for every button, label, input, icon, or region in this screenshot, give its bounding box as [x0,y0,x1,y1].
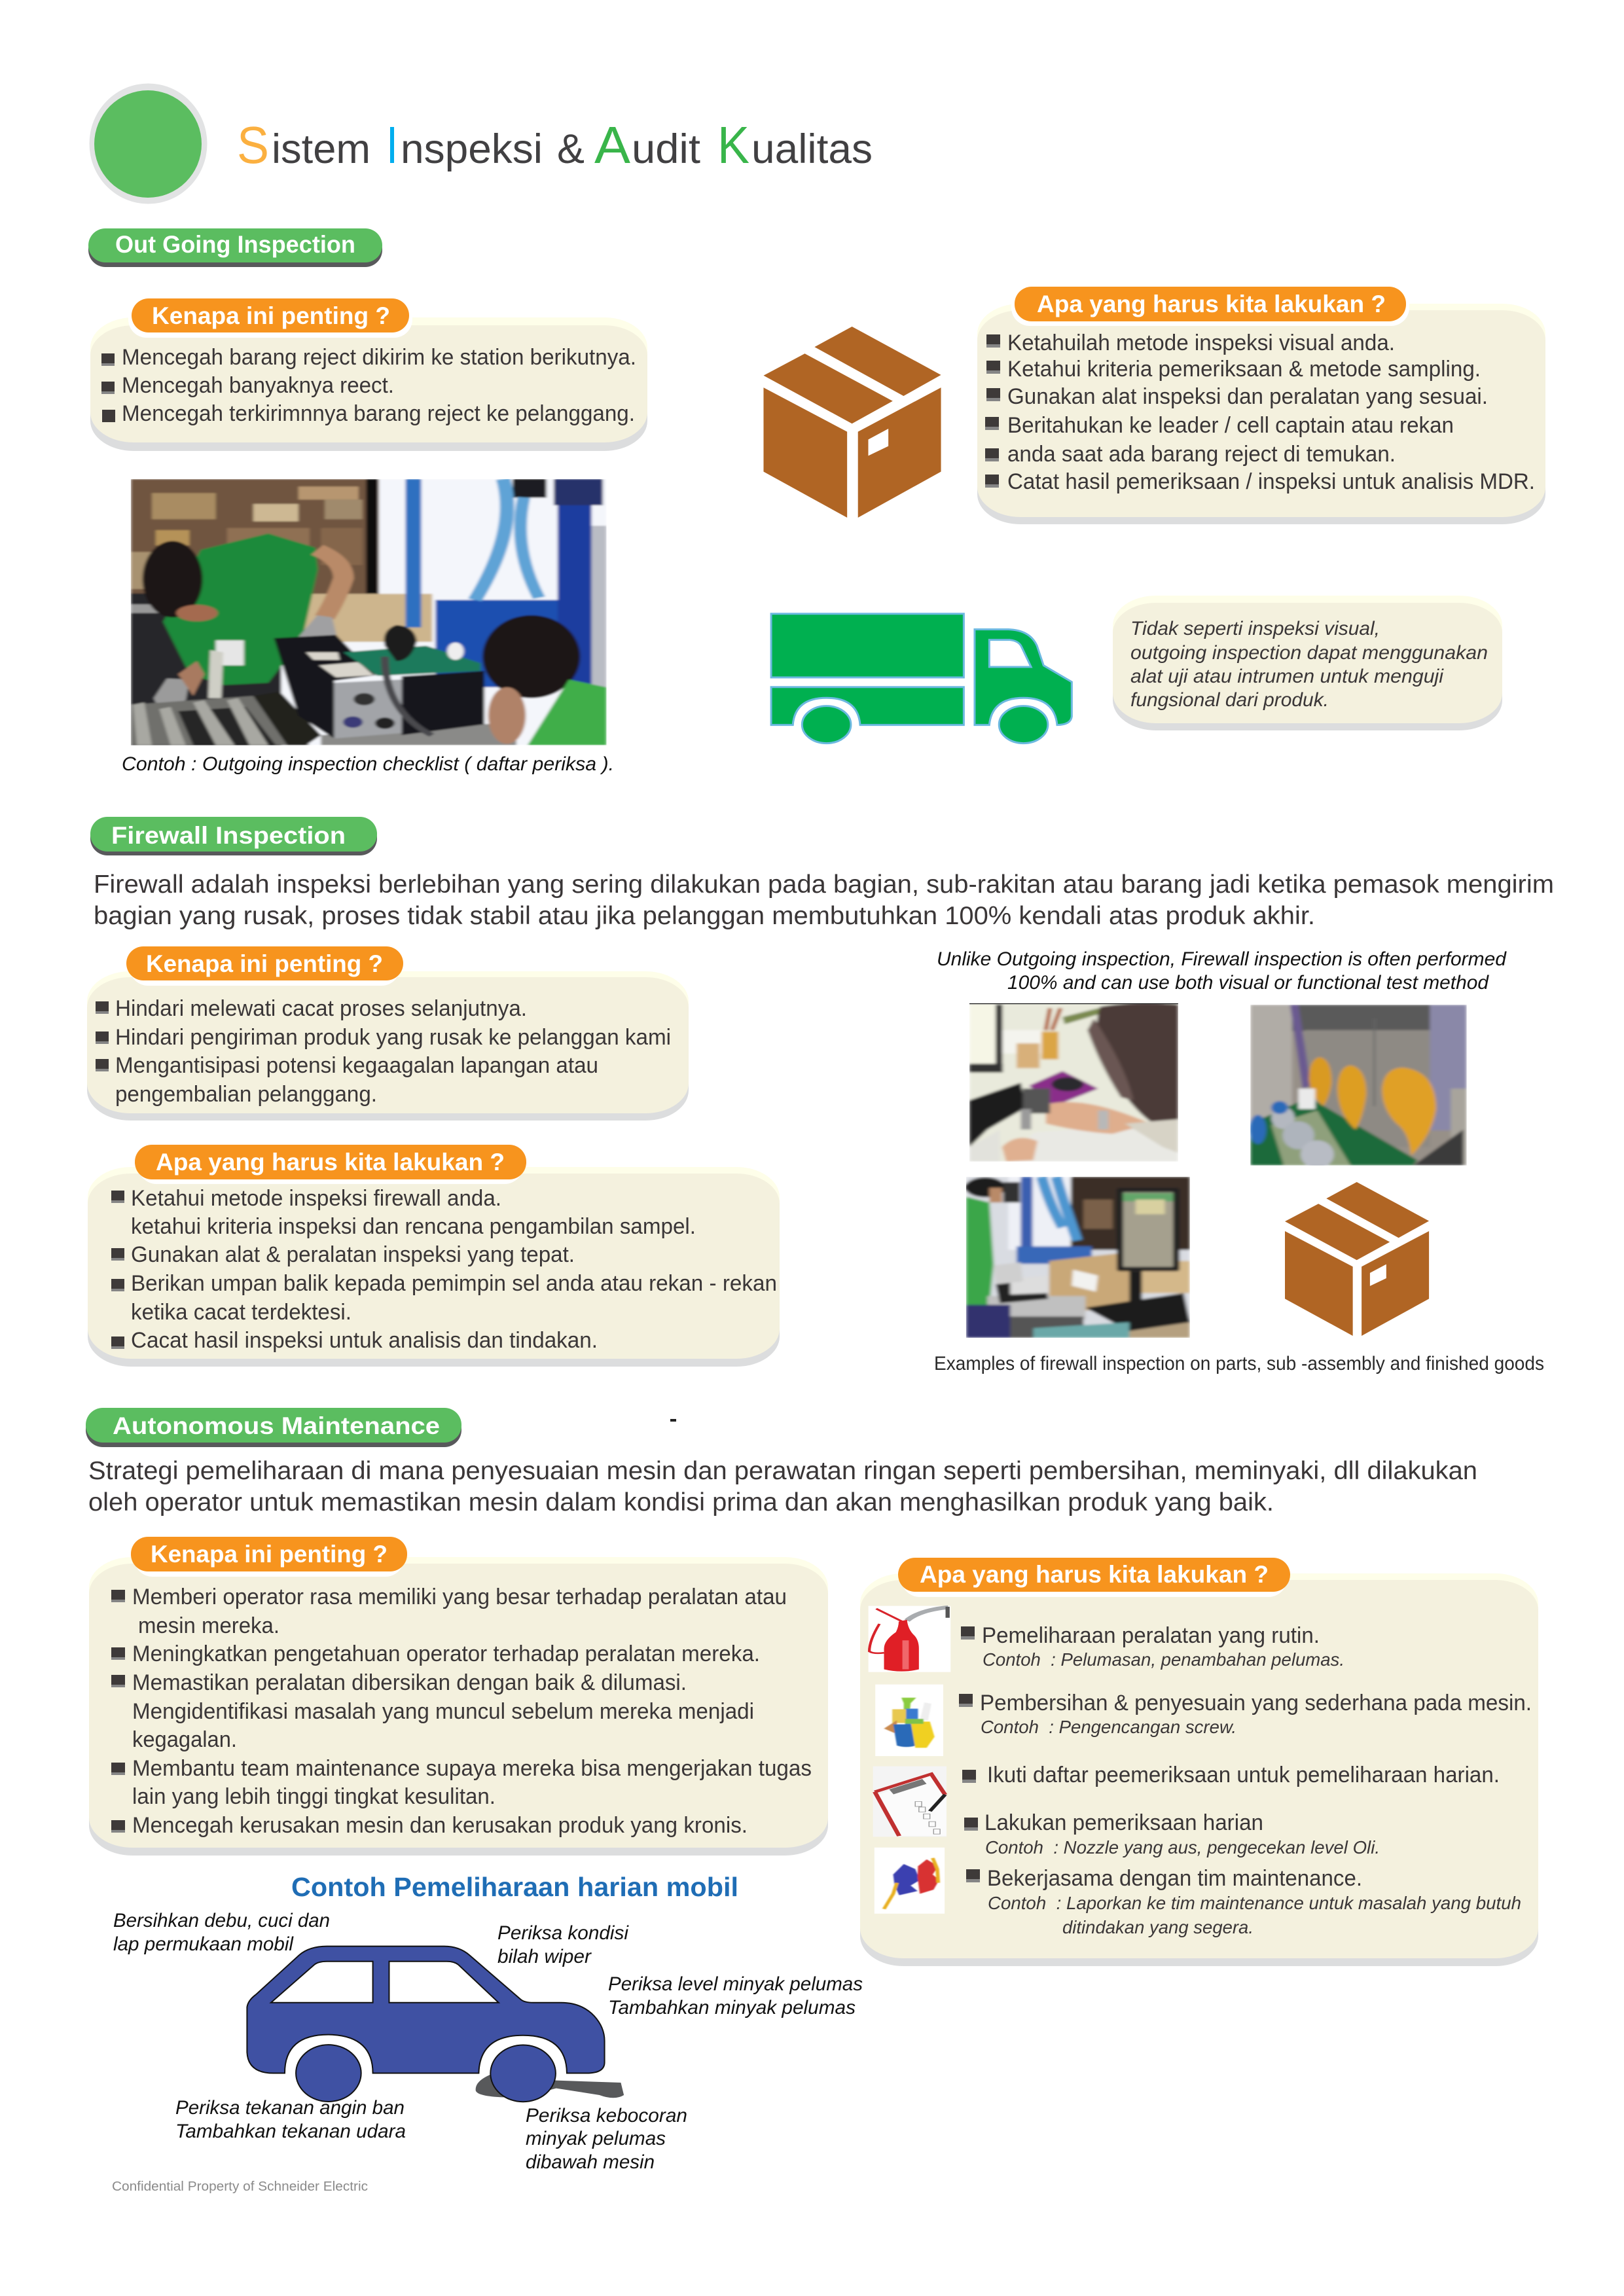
text block: firewall definition: Firewall adalah inspeksi berlebihan yang sering dilakukan pada bagian, sub-rakitan atau barang jadi ketika pemasok mengirim [94,870,1554,899]
bullet list: Berikan umpan balik kepada pemimpin sel anda atau rekan - rekan [131,1271,777,1296]
bullet list: mesin mereka. [138,1613,280,1638]
icon: team with puzzle pieces [875,1848,945,1914]
bullet list: Ketahui kriteria pemeriksaan & metode sampling. [1007,357,1481,382]
text block: firewall note [937,948,1507,994]
bullet list [96,996,671,1107]
title: A [594,116,631,174]
panel: what to do (firewall) [88,1145,780,1367]
bullet list: Ketahuilah metode inspeksi visual anda. [1007,331,1395,355]
icon: clipboard checklist [873,1767,947,1837]
title: S [237,116,269,174]
text block: firewall definition: bagian yang rusak, proses tidak stabil atau jika pelanggan membutuhkan 100% kendali atas produk akhir. [94,902,1315,930]
icon: cardboard box (finished goods) [1285,1182,1429,1336]
list: maintenance tasks: Contoh : Nozzle yang aus, pengecekan level Oli. [985,1837,1380,1857]
photo: measuring part with caliper [969,1003,1178,1162]
list: maintenance tasks: Pembersihan & penyesuain yang sederhana pada mesin. [980,1691,1532,1715]
callout: clean car surface: lap permukaan mobil [113,1933,294,1955]
bullet list: Mencegah kerusakan mesin dan kerusakan produk yang kronis. [132,1813,748,1838]
bullet list [985,331,1535,494]
list: maintenance tasks: ditindakan yang segera. [1062,1917,1254,1937]
photo: functional test station [965,1177,1190,1338]
icon: oil can [869,1606,950,1672]
bullet list: Hindari pengiriman produk yang rusak ke pelanggan kami [115,1025,671,1050]
bullet list: Mencegah terkirimnnya barang reject ke pelanggang. [122,401,635,426]
section heading: Autonomous Maintenance: Autonomous Maintenance [113,1412,440,1439]
bullet list [111,1186,777,1353]
text block: autonomous maintenance definition: oleh operator untuk memastikan mesin dalam kondisi prima dan akan menghasilkan produk yang baik. [88,1488,1274,1516]
bullet list: lain yang lebih tinggi tingkat kesulitan. [132,1784,496,1809]
text block: firewall note: 100% and can use both visual or functional test method [1007,972,1489,994]
callout: oil level: Periksa level minyak pelumas [608,1973,863,1995]
footer: confidentiality note: Confidential Property of Schneider Electric [112,2179,368,2194]
panel: what to do (firewall): Apa yang harus kita lakukan ? [156,1149,505,1175]
list: maintenance tasks: Contoh : Pengencangan screw. [981,1717,1236,1737]
panel: why it matters (maintenance): Kenapa ini penting ? [151,1541,388,1568]
note text: Tidak seperti inspeksi visual, [1130,618,1380,639]
callout: oil leak: Periksa kebocoran [526,2105,687,2126]
note text [1130,618,1488,711]
heading: daily car maintenance example: Contoh Pemeliharaan harian mobil [291,1872,738,1902]
bullet list: Mengidentifikasi masalah yang muncul sebelum mereka menjadi [132,1699,754,1724]
bullet list: Cacat hasil inspeksi untuk analisis dan tindakan. [131,1328,598,1353]
bullet list: Mencegah barang reject dikirim ke station berikutnya. [122,345,636,370]
title [237,116,873,174]
title: K [717,116,749,174]
bullet list [111,1585,812,1838]
title: & [557,126,585,172]
panel: why it matters (outgoing) [90,298,647,451]
bullet list: Ketahui metode inspeksi firewall anda. [131,1186,501,1211]
callout: oil level: Tambahkan minyak pelumas [608,1997,856,2018]
bullet list: Gunakan alat inspeksi dan peralatan yang sesuai. [1007,384,1488,409]
bullet list: Memberi operator rasa memiliki yang besar terhadap peralatan atau [132,1585,787,1609]
callout: tyre pressure: Periksa tekanan angin ban [175,2097,405,2119]
panel: what to do (outgoing) [977,287,1545,524]
bullet list: ketika cacat terdektesi. [131,1300,352,1325]
list: maintenance tasks: Contoh : Laporkan ke tim maintenance untuk masalah yang butuh [988,1893,1521,1913]
caption: firewall examples: Examples of firewall inspection on parts, sub -assembly and finished goods [934,1353,1544,1374]
list: maintenance tasks: Lakukan pemeriksaan harian [984,1810,1263,1835]
bullet list: Beritahukan ke leader / cell captain atau rekan [1007,413,1454,438]
bullet list: ketahui kriteria inspeksi dan rencana pengambilan sampel. [131,1214,696,1239]
bullet list: Memastikan peralatan dibersikan dengan baik & dilumasi. [132,1670,687,1695]
bullet list: Membantu team maintenance supaya mereka bisa mengerjakan tugas [132,1756,812,1781]
callout: oil level [608,1973,863,2018]
list: maintenance tasks: Ikuti daftar peemeriksaan untuk pemeliharaan harian. [987,1763,1500,1787]
callout: wiper condition: Periksa kondisi [497,1922,629,1944]
bullet list: Hindari melewati cacat proses selanjutnya. [115,996,527,1021]
callout: wiper condition: bilah wiper [497,1946,592,1967]
panel: what to do (outgoing): Apa yang harus kita lakukan ? [1037,291,1386,317]
list: maintenance tasks: Bekerjasama dengan tim maintenance. [987,1866,1362,1891]
callout: tyre pressure [175,2097,406,2142]
panel: why it matters (firewall): Kenapa ini penting ? [146,950,383,977]
bullet list [101,345,636,426]
bullet list: Meningkatkan pengetahuan operator terhadap peralatan mereka. [132,1641,760,1666]
callout: clean car surface: Bersihkan debu, cuci dan [113,1910,330,1931]
icon: delivery truck [771,614,1072,744]
title: ualitas [751,126,873,172]
photo: operator inspecting unit on conveyor [131,479,607,746]
title: udit [632,126,701,172]
section heading: Out Going Inspection [88,228,382,267]
icon: cleaning supplies [875,1685,943,1756]
callout: oil leak: minyak pelumas [526,2128,666,2149]
note text: fungsional dari produk. [1130,689,1329,711]
note text: outgoing inspection dapat menggunakan [1130,642,1488,664]
illustration: car with oil leak [247,1946,624,2102]
list: maintenance tasks: Pemeliharaan peralatan yang rutin. [982,1623,1320,1648]
bullet list: pengembalian pelanggang. [115,1082,377,1107]
list: maintenance tasks [959,1623,1532,1937]
panel: why it matters (outgoing): Kenapa ini penting ? [152,302,390,329]
bullet list: anda saat ada barang reject di temukan. [1007,442,1396,467]
bullet list: Gunakan alat & peralatan inspeksi yang tepat. [131,1242,575,1267]
bullet list: Mencegah banyaknya reect. [122,373,394,398]
photo: varistors on circuit board [1250,1005,1467,1168]
title: I [386,116,398,174]
text block: firewall note: Unlike Outgoing inspection, Firewall inspection is often performed [937,948,1507,970]
note text: alat uji atau intrumen untuk menguji [1130,666,1444,687]
section heading: Firewall Inspection: Firewall Inspection [111,822,346,849]
callout: clean car surface [113,1910,330,1955]
stray dash [670,1419,676,1422]
bullet list: kegagalan. [132,1727,237,1752]
section heading: Firewall Inspection [90,817,377,855]
section heading: Autonomous Maintenance [86,1408,461,1447]
text block: autonomous maintenance definition [88,1457,1477,1516]
panel: what to do (maintenance): Apa yang harus kita lakukan ? [920,1561,1269,1588]
callout: tyre pressure: Tambahkan tekanan udara [175,2121,406,2142]
list: maintenance tasks: Contoh : Pelumasan, penambahan pelumas. [983,1649,1344,1670]
callout: wiper condition [497,1922,629,1967]
caption: outgoing inspection photo: Contoh : Outgoing inspection checklist ( daftar periksa ). [122,753,614,775]
panel: why it matters (firewall) [87,946,689,1121]
section heading: Out Going Inspection: Out Going Inspection [115,231,355,258]
panel: what to do (maintenance) [860,1558,1538,1966]
text block: autonomous maintenance definition: Strategi pemeliharaan di mana penyesuaian mesin dan perawatan ringan seperti pembersihan, meminyaki, dll dilakukan [88,1457,1477,1485]
panel: why it matters (maintenance) [89,1537,828,1856]
bullet list: Mengantisipasi potensi kegaagalan lapangan atau [115,1053,598,1078]
callout: oil leak [526,2105,687,2173]
bullet list: Catat hasil pemeriksaan / inspeksi untuk analisis MDR. [1007,469,1535,494]
icon: cardboard box [763,327,941,518]
title: istem [272,126,370,172]
text block: firewall definition [94,870,1554,930]
title badge: green circle [89,84,207,204]
title: nspeksi [401,126,543,172]
callout: oil leak: dibawah mesin [526,2151,655,2173]
panel: note on functional testing [1113,596,1502,730]
